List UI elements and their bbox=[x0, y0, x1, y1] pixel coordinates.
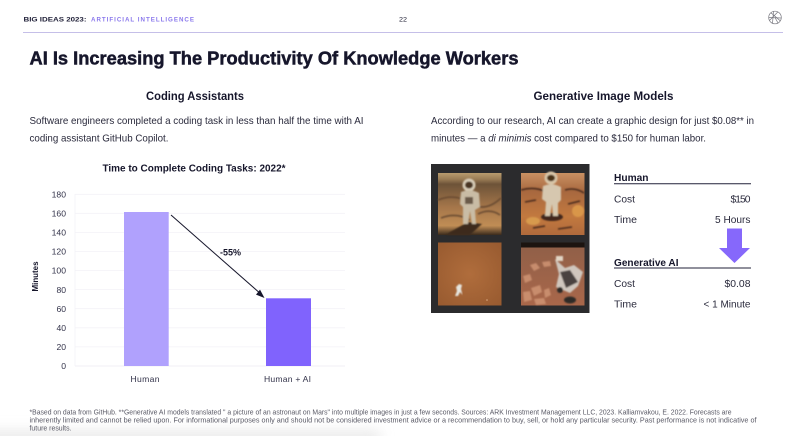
panel: coding assistants bbox=[30, 89, 364, 384]
y axis labels: 100 bbox=[52, 266, 66, 276]
text block: coding assistants description: Software engineers completed a coding task in less than half the time with AI bbox=[30, 116, 364, 127]
chart title: Time to Complete Coding Tasks: 2022* bbox=[102, 164, 286, 174]
text block: generative models description: minutes — a di minimis cost compared to $150 for human labor. bbox=[431, 134, 706, 144]
table section: human: $150 bbox=[730, 194, 751, 206]
label: -55%: -55% bbox=[220, 248, 241, 258]
image: astronaut 3 bbox=[438, 242, 502, 306]
y axis labels bbox=[52, 190, 66, 371]
y axis labels: 20 bbox=[56, 342, 66, 352]
title: AI Is Increasing The Productivity Of Knowledge Workers bbox=[30, 48, 518, 68]
text block: coding assistants description: coding assistant GitHub Copilot. bbox=[30, 134, 168, 144]
table section: generative AI: < 1 Minute bbox=[704, 300, 751, 310]
x axis labels bbox=[130, 374, 311, 384]
y axis labels: 0 bbox=[61, 361, 66, 371]
table section: human: Human bbox=[614, 173, 648, 184]
bar chart bbox=[31, 190, 345, 384]
y axis labels: 160 bbox=[52, 208, 66, 218]
table section: generative AI: Cost bbox=[614, 279, 635, 290]
footnote bbox=[30, 408, 756, 432]
footnote: future results. bbox=[30, 424, 72, 432]
y axis labels: 40 bbox=[56, 323, 66, 333]
header topic label: ARTIFICIAL INTELLIGENCE bbox=[91, 16, 194, 24]
comparison table bbox=[614, 173, 751, 310]
text block: generative models description: According to our research, AI can create a graphic design for just $0.08** in bbox=[431, 116, 754, 127]
text block: generative models description bbox=[431, 116, 754, 144]
footnote: inherently limited and cannot be relied upon. For informational purposes only and should not be considered investment advice or a recommendation to buy, sell, or hold any particular security. Past performance is not indicative of bbox=[30, 416, 756, 424]
text block: coding assistants description bbox=[30, 116, 364, 144]
heading: coding assistants: Coding Assistants bbox=[146, 89, 244, 103]
y axis title: Minutes bbox=[31, 261, 40, 292]
table section: human: 5 Hours bbox=[715, 215, 750, 226]
x axis labels: Human bbox=[130, 374, 160, 384]
footnote: *Based on data from GitHub. **Generative AI models translated " a picture of an astronaut on Mars" into multiple images in just a few seconds. Sources: ARK Investment Management LLC, 2023. Kalliamvakou, E. 2022. Forecasts are bbox=[30, 408, 732, 416]
header bbox=[23, 11, 783, 32]
table section: human bbox=[614, 173, 751, 226]
y axis labels: 120 bbox=[52, 246, 66, 256]
x axis labels: Human + AI bbox=[264, 374, 311, 384]
heading: generative image models: Generative Image Models bbox=[534, 89, 674, 103]
header section label: BIG IDEAS 2023: bbox=[24, 16, 86, 24]
table section: human: Time bbox=[614, 215, 637, 226]
y axis labels: 180 bbox=[52, 190, 66, 200]
image: astronaut 2 bbox=[521, 172, 584, 235]
image grid: astronauts on Mars bbox=[431, 164, 590, 313]
table section: generative AI bbox=[614, 258, 751, 310]
table section: generative AI: Time bbox=[614, 300, 637, 310]
image: rover bbox=[521, 242, 584, 306]
image: astronaut 1 bbox=[438, 173, 502, 235]
bar: human + AI bbox=[266, 298, 311, 366]
table section: human: Cost bbox=[614, 194, 635, 206]
y axis labels: 80 bbox=[56, 285, 66, 295]
arrow: purple down bbox=[719, 228, 750, 263]
page number: 22 bbox=[399, 16, 407, 24]
table section: generative AI: $0.08 bbox=[724, 279, 751, 290]
bar: human bbox=[124, 212, 169, 366]
arrow: decrease bbox=[171, 215, 264, 298]
footer shading bbox=[0, 431, 380, 436]
icon: ARK logo bbox=[769, 11, 781, 24]
y axis labels: 60 bbox=[56, 304, 66, 314]
table section: generative AI: Generative AI bbox=[614, 258, 679, 269]
y axis labels: 140 bbox=[52, 228, 66, 238]
panel: generative image models bbox=[431, 89, 754, 313]
